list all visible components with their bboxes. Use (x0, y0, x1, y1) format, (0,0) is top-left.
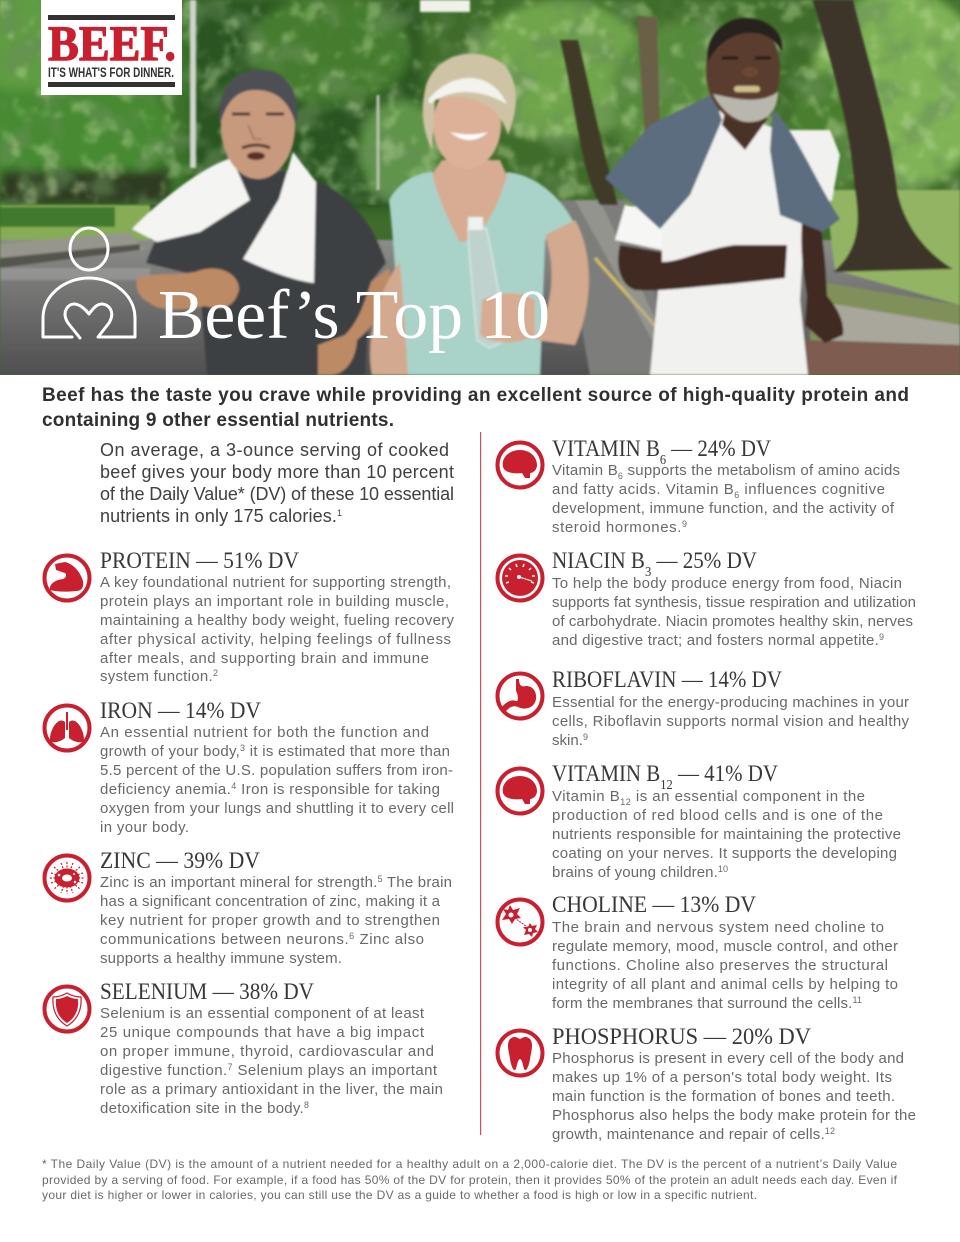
panel: vitamin B6: 6 (660, 453, 666, 468)
panel: vitamin B6: 9 (682, 519, 687, 529)
panel: selenium: 8 (304, 1100, 309, 1110)
intro paragraph: of the Daily Value* (DV) of these 10 essential (100, 484, 454, 504)
logo: Beef. It's What's For Dinner (41, 0, 182, 95)
panel: protein: after meals, and supporting brain and immune (100, 650, 429, 667)
panel: protein: system function. (100, 668, 213, 685)
icon: brain (498, 768, 542, 814)
panel: vitamin B12: 12 (620, 797, 631, 807)
panel: iron: deficiency anemia. (100, 781, 231, 798)
panel: phosphorus: 12 (825, 1126, 835, 1136)
man right (650, 110, 840, 375)
panel: choline (498, 892, 898, 1012)
panel: selenium: SELENIUM — 38% DV (100, 979, 314, 1005)
column divider (480, 432, 481, 1135)
panel: niacin B3: of carbohydrate. Niacin promotes healthy skin, nerves (552, 613, 913, 630)
icon: gauge (498, 556, 542, 600)
panel: niacin B3: 3 (645, 565, 651, 580)
panel: phosphorus: PHOSPHORUS — 20% DV (552, 1024, 811, 1050)
woman (389, 172, 575, 375)
icon: brain (498, 442, 542, 488)
panel: protein: protein plays an important role in building muscle, (100, 593, 449, 610)
panel: protein (44, 548, 454, 685)
panel: iron: 4 (231, 781, 236, 791)
panel: zinc: communications between neurons. (100, 931, 349, 948)
panel: niacin B3: supports fat synthesis, tissue respiration and utilization (552, 594, 916, 611)
panel: vitamin B12 (498, 761, 901, 881)
footnote: your diet is higher or lower in calories, you can still use the DV as a guide to whether a food is high or low in a specific nutrient. (42, 1188, 757, 1202)
panel: vitamin B12: 10 (718, 864, 728, 874)
lead statement: containing 9 other essential nutrients. (42, 410, 394, 431)
panel: zinc: has a significant concentration of zinc, making it a (100, 893, 441, 910)
panel: iron: An essential nutrient for both the function and (100, 724, 429, 741)
panel: choline: form the membranes that surround the cells. (552, 995, 852, 1012)
panel: zinc: key nutrient for proper growth and to strengthen (100, 912, 440, 929)
panel: zinc: 6 (349, 931, 354, 941)
panel: phosphorus: makes up 1% of a person's total body weight. Its (552, 1069, 892, 1086)
panel: protein: maintaining a healthy body weight, fueling recovery (100, 612, 454, 629)
panel: phosphorus: main function is the formation of bones and teeth. (552, 1088, 895, 1105)
title: Beef’s Top 10 (158, 277, 550, 354)
panel: selenium: 7 (228, 1062, 233, 1072)
panel: vitamin B6: — 24% DV (666, 436, 771, 462)
panel: riboflavin: skin. (552, 732, 583, 749)
panel: niacin B3 (498, 548, 916, 649)
panel: vitamin B6: supports the metabolism of amino acids (623, 462, 900, 479)
panel: selenium: on proper immune, thyroid, cardiovascular and (100, 1043, 434, 1060)
footnote: provided by a serving of food. For example, if a food has 50% of the DV for protein, then it provides 50% of the protein an adult needs each day. Even if (42, 1173, 898, 1187)
icon: stomach (498, 674, 542, 718)
intro paragraph: 1 (337, 508, 342, 518)
panel: vitamin B6: Vitamin B (552, 462, 618, 479)
panel: phosphorus: Phosphorus is present in every cell of the body and (552, 1050, 904, 1067)
lead statement (42, 385, 909, 431)
panel: niacin B3: NIACIN B (552, 548, 656, 574)
panel: protein: 2 (213, 668, 218, 678)
panel: iron: Iron is responsible for taking (237, 781, 440, 798)
panel: vitamin B12: coating on your nerves. It supports the developing (552, 845, 897, 862)
panel: iron: IRON — 14% DV (100, 698, 261, 724)
intro paragraph (100, 440, 454, 526)
panel: selenium: digestive function. (100, 1062, 227, 1079)
icon: muscle (44, 556, 90, 600)
logo: Beef. It's What's For Dinner: IT'S WHAT'S FOR DINNER. (48, 65, 174, 80)
panel: niacin B3: 9 (879, 632, 884, 642)
panel: vitamin B6: development, immune function, and the activity of (552, 500, 895, 517)
panel: iron: it is estimated that more than (245, 743, 450, 760)
panel: riboflavin (498, 667, 910, 749)
panel: selenium: Selenium is an essential component of at least (100, 1005, 425, 1022)
panel: vitamin B12: 12 (660, 778, 673, 793)
panel: iron: 5.5 percent of the U.S. population suffers from iron- (100, 762, 453, 779)
panel: phosphorus: growth, maintenance and repair of cells. (552, 1126, 825, 1143)
panel: riboflavin: cells, Riboflavin supports normal vision and healthy (552, 713, 910, 730)
man left (146, 169, 386, 375)
panel: selenium: Selenium plays an important (233, 1062, 438, 1079)
panel: niacin B3: — 25% DV (651, 548, 757, 574)
panel: zinc: Zinc is an important mineral for strength. (100, 874, 377, 891)
panel: riboflavin: Essential for the energy-producing machines in your (552, 694, 909, 711)
panel: vitamin B6: 6 (734, 490, 739, 500)
panel: iron: in your body. (100, 819, 189, 836)
panel: selenium: detoxification site in the body. (100, 1100, 304, 1117)
panel: choline: The brain and nervous system need choline to (552, 919, 884, 936)
panel: choline: 11 (852, 995, 862, 1005)
panel: iron: oxygen from your lungs and shuttling it to every cell (100, 800, 454, 817)
intro paragraph: On average, a 3-ounce serving of cooked (100, 440, 449, 460)
panel: iron: 3 (240, 743, 245, 753)
panel: vitamin B6: 6 (618, 471, 623, 481)
icon: person with heart (43, 228, 135, 338)
intro paragraph: nutrients in only 175 calories. (100, 506, 337, 526)
panel: protein: PROTEIN — 51% DV (100, 548, 299, 574)
panel: iron (44, 698, 454, 836)
foliage dapple (0, 0, 960, 205)
panel: vitamin B12: brains of young children. (552, 864, 718, 881)
panel: vitamin B6: influences cognitive (740, 481, 885, 498)
logo: Beef. It's What's For Dinner: BEEF. (48, 15, 176, 71)
panel: choline: functions. Choline also preserves the structural (552, 957, 888, 974)
icon: shield (44, 986, 90, 1032)
panel: protein: A key foundational nutrient for supporting strength, (100, 574, 451, 591)
hero photo: three joggers in a park (0, 0, 960, 375)
panel: vitamin B12: Vitamin B (552, 788, 620, 805)
panel: vitamin B12: nutrients responsible for maintaining the protective (552, 826, 901, 843)
panel: zinc (44, 848, 452, 967)
intro paragraph: beef gives your body more than 10 percent (100, 462, 454, 482)
panel: choline: CHOLINE — 13% DV (552, 892, 756, 918)
panel: selenium: 25 unique compounds that have a big impact (100, 1024, 425, 1041)
panel: riboflavin: RIBOFLAVIN — 14% DV (552, 667, 782, 693)
panel: phosphorus: Phosphorus also helps the body make protein for the (552, 1107, 916, 1124)
footnote (42, 1157, 898, 1202)
panel: zinc: ZINC — 39% DV (100, 848, 260, 874)
panel: vitamin B6: and fatty acids. Vitamin B (552, 481, 734, 498)
panel: zinc: Zinc also (355, 931, 424, 948)
panel: niacin B3: and digestive tract; and fosters normal appetite. (552, 632, 879, 649)
icon: zinc cell (44, 856, 90, 900)
panel: protein: after physical activity, helping feelings of fullness (100, 631, 451, 648)
panel: selenium (44, 979, 443, 1117)
lead statement: Beef has the taste you crave while providing an excellent source of high-quality protein and (42, 385, 909, 406)
panel: vitamin B6 (498, 436, 900, 536)
panel: choline: integrity of all plant and animal cells by helping to (552, 976, 898, 993)
panel: vitamin B12: is an essential component in the (631, 788, 865, 805)
icon: lungs (44, 706, 90, 750)
panel: choline: regulate memory, mood, muscle control, and other (552, 938, 898, 955)
panel: zinc: supports a healthy immune system. (100, 950, 342, 967)
panel: selenium: role as a primary antioxidant in the liver, the main (100, 1081, 443, 1098)
icon: tooth (498, 1030, 542, 1076)
panel: phosphorus (498, 1024, 916, 1143)
panel: zinc: 5 (378, 874, 383, 884)
panel: vitamin B6: VITAMIN B (552, 436, 673, 462)
panel: riboflavin: 9 (583, 732, 588, 742)
footnote: * The Daily Value (DV) is the amount of a nutrient needed for a healthy adult on a 2,000-calorie diet. The DV is the percent of a nutrient’s Daily Value (42, 1157, 897, 1171)
panel: vitamin B12: production of red blood cells and is one of the (552, 807, 883, 824)
icon: neurons (498, 900, 542, 944)
panel: vitamin B12: — 41% DV (673, 761, 778, 787)
panel: zinc: The brain (383, 874, 452, 891)
panel: iron: growth of your body, (100, 743, 240, 760)
panel: niacin B3: To help the body produce energy from food, Niacin (552, 575, 902, 592)
panel: vitamin B6: steroid hormones. (552, 519, 681, 536)
panel: vitamin B12: VITAMIN B (552, 761, 673, 787)
